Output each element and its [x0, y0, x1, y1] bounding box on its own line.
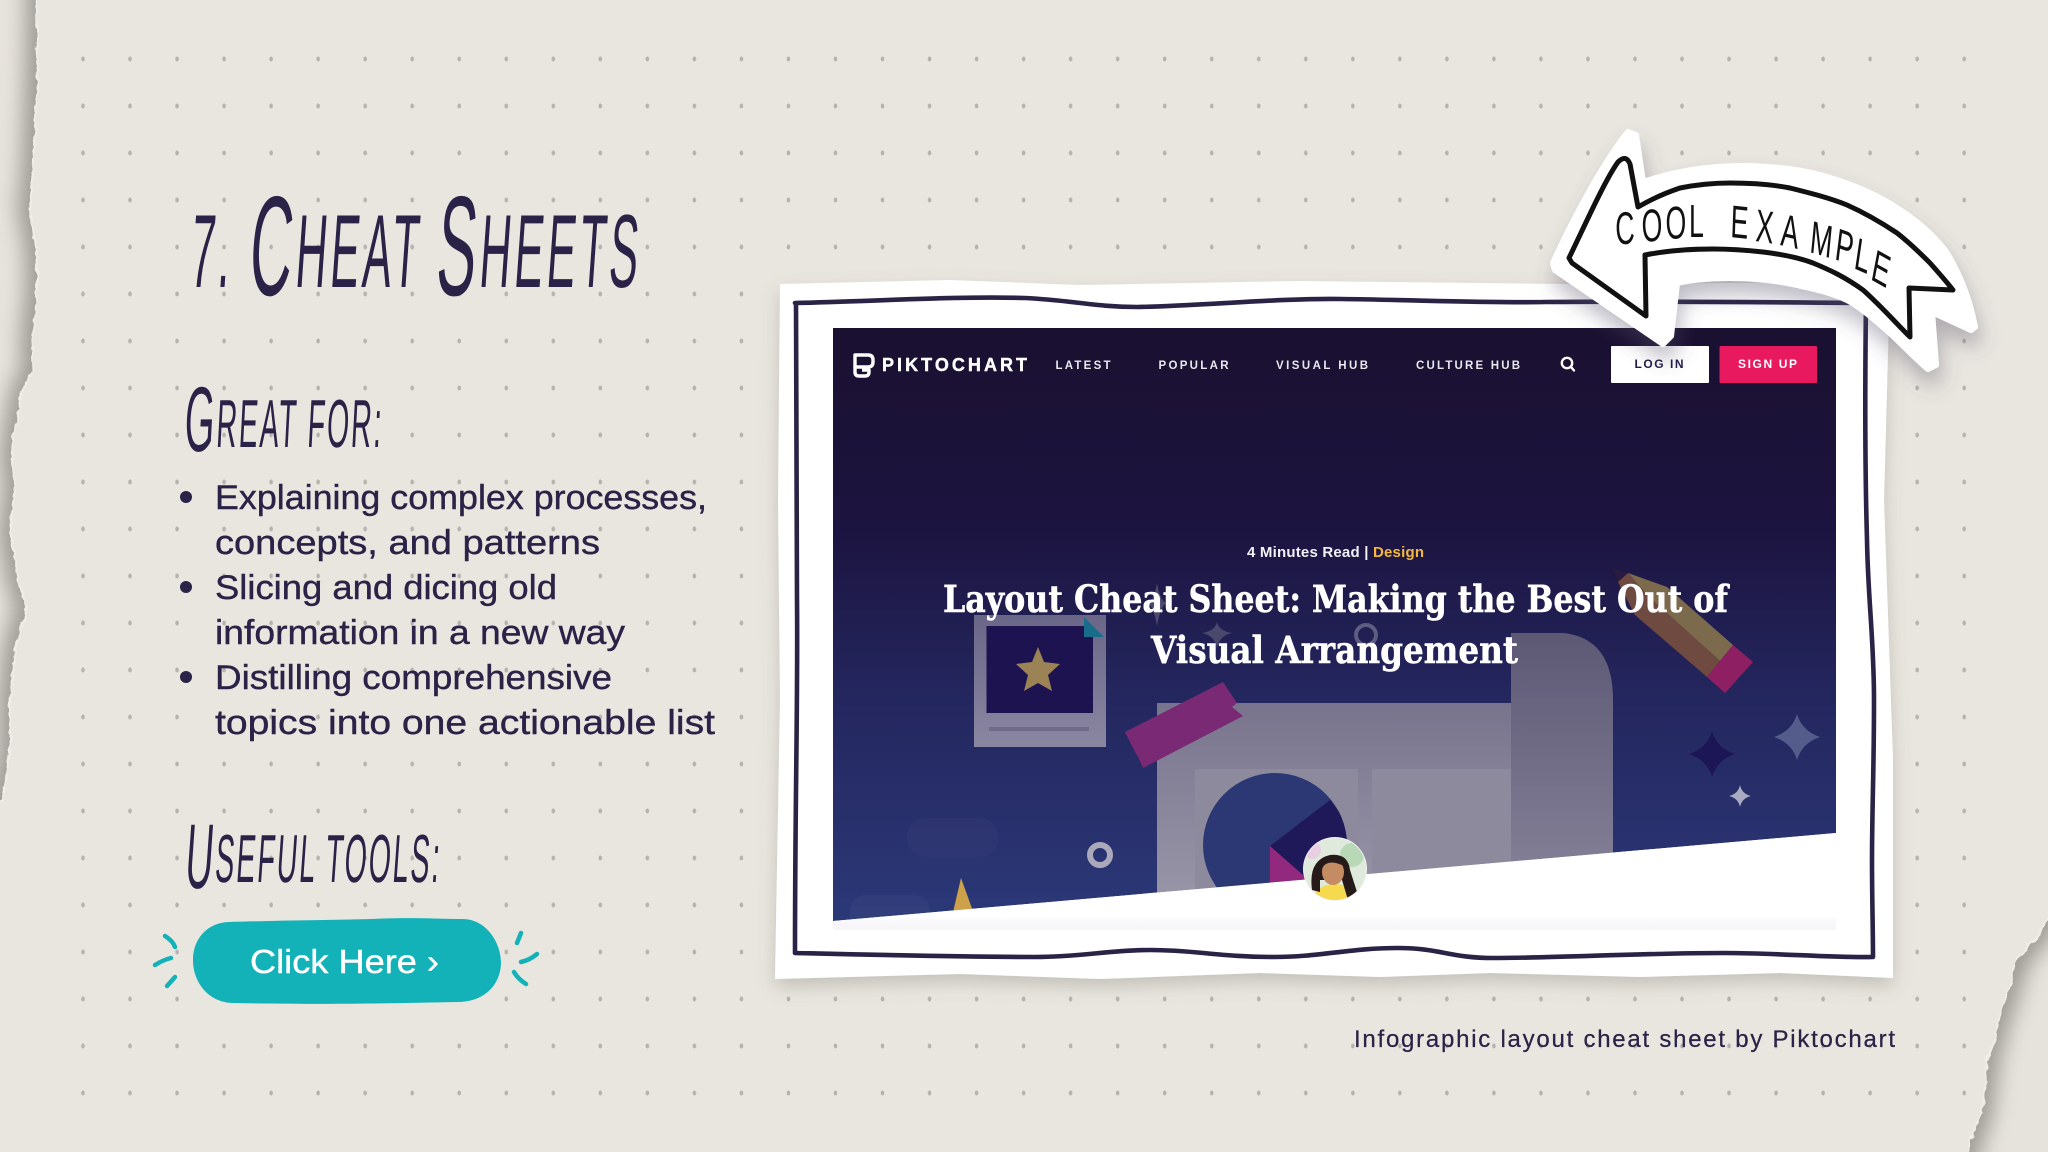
bullet list: concepts, and patterns — [215, 524, 600, 562]
caption: Infographic layout cheat sheet by Piktochart — [1354, 1026, 1895, 1053]
rings — [1090, 845, 1110, 865]
button: click here: Click Here › — [250, 943, 439, 980]
washi tape — [1125, 682, 1243, 768]
author avatar — [1303, 837, 1367, 905]
pencil — [1612, 568, 1753, 693]
cool example banner — [1553, 132, 1975, 369]
sparkle marks — [155, 933, 537, 986]
pie chart — [1203, 773, 1347, 888]
polaroid illustration — [974, 615, 1106, 747]
sign up button — [1720, 346, 1817, 383]
title: C — [245, 167, 302, 326]
screenshot: hero background — [833, 328, 1836, 943]
text: REAT FOR: — [215, 386, 386, 462]
nav links: LATEST — [1056, 360, 1110, 372]
meta line: 4 Minutes Read | Design — [1247, 544, 1424, 561]
text: SEFUL TOOLS: — [213, 821, 445, 897]
bullet list: Explaining complex processes, — [215, 479, 707, 517]
page scroll illustration — [1157, 633, 1613, 892]
text: HEETS — [476, 194, 646, 310]
title: 7. — [187, 194, 300, 310]
photo frame — [775, 280, 1893, 979]
banner outline — [1569, 158, 1953, 337]
icon: search — [1562, 358, 1574, 370]
title: HEAT — [292, 194, 442, 310]
log in button — [1611, 346, 1709, 383]
heading: useful tools: U — [183, 805, 219, 908]
faint pills — [907, 818, 998, 857]
title: S — [432, 167, 486, 326]
banner label: COOL EXAMPLE — [1614, 195, 1894, 298]
sign up button: SIGN UP — [1738, 357, 1797, 371]
log in button: LOG IN — [1634, 357, 1684, 371]
heading: great for: G — [182, 368, 220, 471]
article headline: Layout Cheat Sheet: Making the Best Out of — [943, 577, 1730, 621]
button: click here — [155, 918, 537, 1004]
hand-drawn frame — [795, 298, 1874, 958]
bullet list: Distilling comprehensive — [215, 659, 612, 697]
article headline: Visual Arrangement — [1150, 628, 1518, 672]
bullet list — [180, 479, 716, 742]
screenshot: white footer — [833, 833, 1836, 930]
nav links — [1056, 360, 1520, 372]
article headline — [943, 577, 1730, 672]
nav links: CULTURE HUB — [1416, 360, 1520, 372]
nav links: POPULAR — [1158, 360, 1229, 372]
yellow triangle — [953, 878, 972, 910]
logo: PIKTOCHART — [882, 355, 1027, 375]
bullet list: Slicing and dicing old — [215, 569, 557, 607]
sparkle stars — [1689, 731, 1735, 777]
bullet list: information in a new way — [215, 614, 625, 652]
bullet list: topics into one actionable list — [215, 704, 716, 742]
nav links: VISUAL HUB — [1276, 360, 1368, 372]
